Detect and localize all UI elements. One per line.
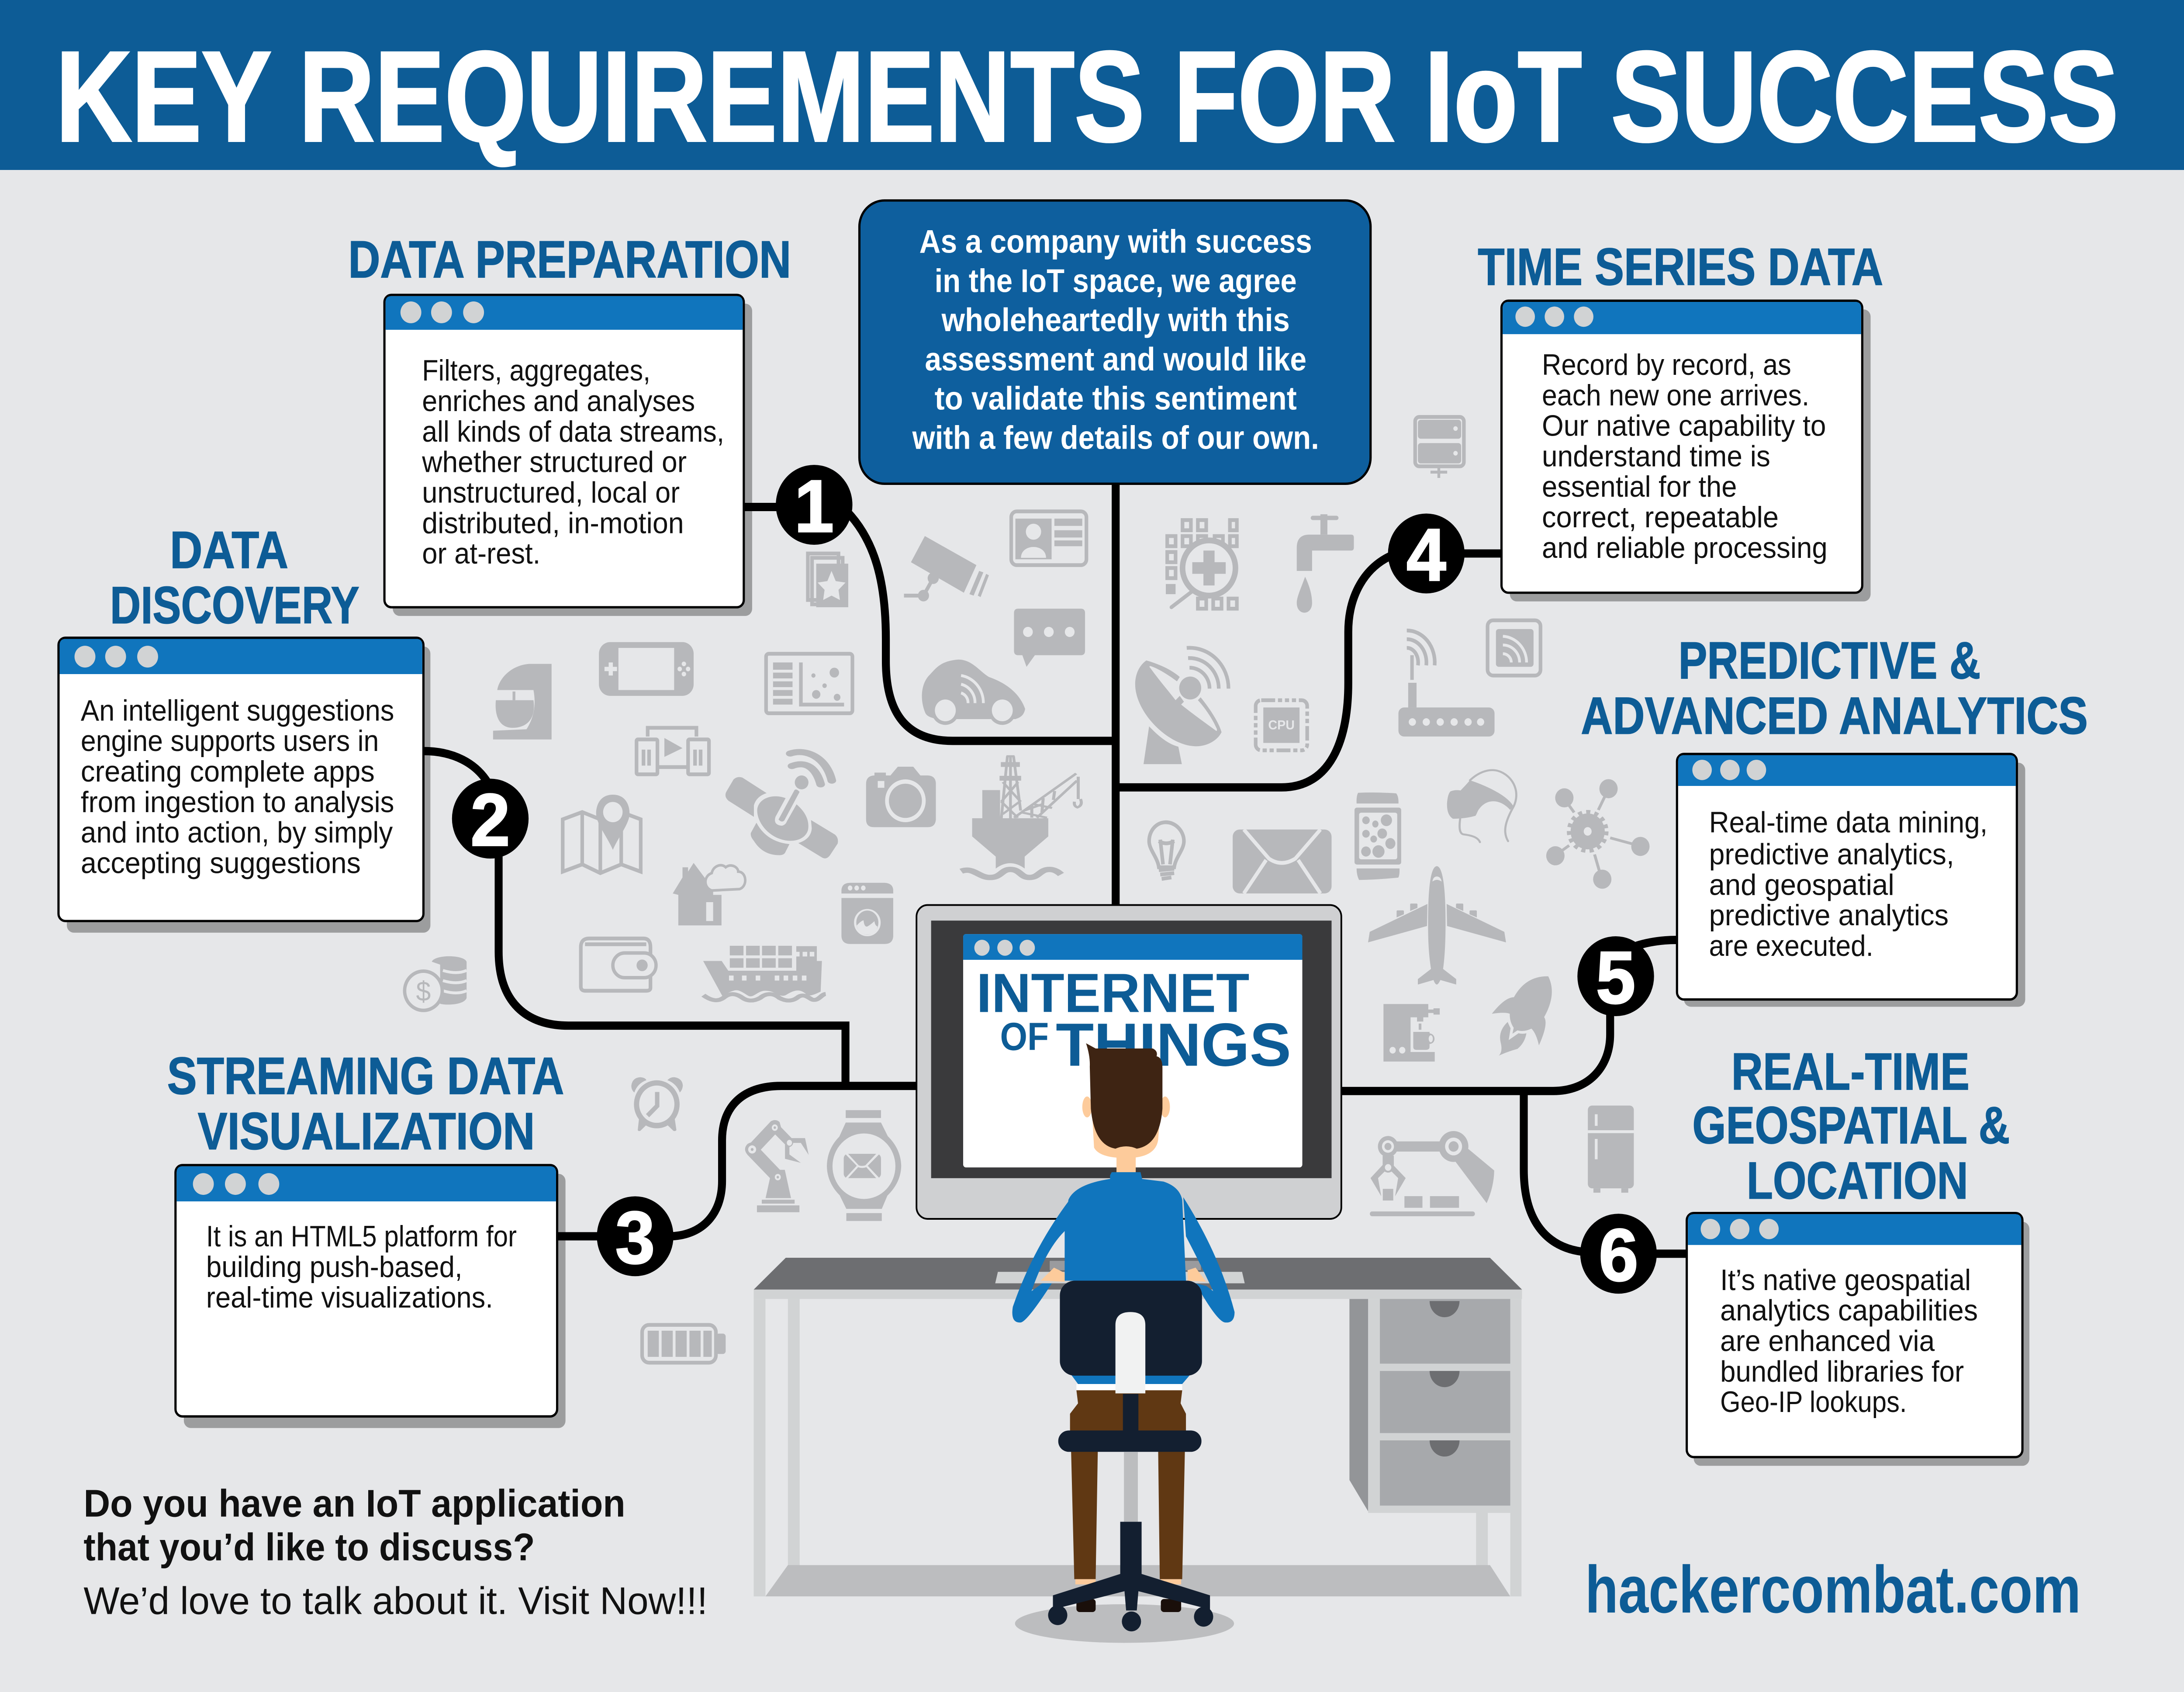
panel: data preparation: unstructured, local or — [422, 476, 680, 509]
panel: predictive and advanced analytics: Real-time data mining, — [1709, 806, 1987, 839]
monitor — [916, 905, 1341, 1219]
panel: time series data: Our native capability to — [1542, 409, 1826, 443]
icon: network gear — [1546, 779, 1649, 889]
icon: coffee machine — [1383, 1004, 1440, 1062]
panel: time series data: essential for the — [1542, 471, 1737, 504]
icon: cpu chip: CPU — [1268, 718, 1295, 732]
panel: data preparation: distributed, in-motion — [422, 507, 684, 540]
panel: streaming data visualization: It is an HTML5 platform for — [206, 1220, 517, 1253]
icon: refrigerator — [1588, 1106, 1634, 1193]
icon: security camera — [904, 536, 989, 602]
panel: real-time geospatial and location: bundled libraries for — [1720, 1355, 1964, 1388]
icon: data panel — [766, 654, 853, 713]
panel: data discovery: engine supports users in — [81, 725, 379, 758]
icon: nfc tag — [1488, 620, 1541, 675]
panel: real-time geospatial and location — [1687, 1213, 2029, 1466]
desk and person illustration — [754, 1043, 1522, 1643]
icon: stand mixer — [493, 664, 552, 740]
icon: camera — [866, 767, 936, 827]
panel: company statement: wholeheartedly with this — [941, 302, 1290, 339]
office chair — [1048, 1281, 1213, 1631]
heading: predictive and advanced analytics: ADVANCED ANALYTICS — [1581, 686, 2088, 745]
number badge 6: 6 — [1599, 1214, 1638, 1297]
icon: mail watch — [827, 1110, 901, 1221]
number badge 3 — [597, 1196, 674, 1279]
panel: data preparation: Filters, aggregates, — [422, 354, 650, 388]
panel: predictive and advanced analytics — [1677, 754, 2025, 1007]
panel: predictive and advanced analytics: predictive analytics — [1709, 899, 1949, 932]
panel: time series data: Record by record, as — [1542, 349, 1791, 381]
icon: id card — [1011, 512, 1086, 565]
number badge 5: 5 — [1596, 937, 1635, 1019]
panel: time series data: each new one arrives. — [1542, 379, 1809, 412]
desk — [754, 1258, 1522, 1596]
panel: streaming data visualization: building push-based, — [206, 1251, 463, 1284]
icon: multi device video — [636, 728, 709, 774]
number badge 1: 1 — [795, 465, 834, 548]
floor shadow — [1015, 1604, 1234, 1643]
number badge 4: 4 — [1406, 514, 1446, 596]
heading: streaming data visualization: VISUALIZATION — [198, 1102, 535, 1160]
icon: satellite dish — [1135, 648, 1229, 764]
icon: airplane — [1368, 866, 1506, 985]
panel: data discovery: An intelligent suggestions — [81, 694, 394, 727]
panel: company statement — [859, 201, 1371, 484]
monitor: OF — [1000, 1014, 1049, 1059]
icon: rocket — [1492, 976, 1552, 1056]
icon: server — [1415, 417, 1464, 478]
icon: smartwatch — [1355, 792, 1401, 880]
panel: data preparation: whether structured or — [422, 446, 687, 479]
panel: time series data: understand time is — [1542, 440, 1770, 473]
panel: company statement: in the IoT space, we agree — [935, 263, 1297, 299]
panel: real-time geospatial and location: are enhanced via — [1720, 1325, 1935, 1358]
panel: time series data: and reliable processing — [1542, 532, 1828, 564]
call to action text: We’d love to talk about it. Visit Now!!! — [83, 1580, 708, 1623]
number badge 3: 3 — [615, 1197, 655, 1279]
panel: predictive and advanced analytics: predictive analytics, — [1709, 838, 1954, 871]
icon: wifi router — [1399, 630, 1495, 737]
number badge 2 — [452, 779, 529, 862]
panel: streaming data visualization — [176, 1165, 566, 1428]
heading: real-time geospatial and location — [1692, 1042, 2010, 1210]
panel: company statement: As a company with success — [919, 223, 1312, 260]
heading: data discovery: DATA — [170, 521, 288, 579]
icon: alarm clock — [631, 1077, 683, 1131]
number badge 4 — [1388, 514, 1465, 596]
icon: coins — [404, 956, 467, 1010]
heading: data discovery: DISCOVERY — [110, 576, 359, 634]
number badge 6 — [1580, 1214, 1657, 1297]
panel: data preparation: enriches and analyses — [422, 385, 695, 418]
panel: data discovery: from ingestion to analysis — [81, 786, 394, 819]
icon: battery — [642, 1325, 726, 1363]
icon: light bulb — [1149, 822, 1184, 879]
panel: data preparation: all kinds of data streams, — [422, 415, 724, 448]
icon: envelope — [1233, 830, 1331, 893]
panel: real-time geospatial and location: It’s native geospatial — [1720, 1264, 1971, 1297]
panel: company statement: with a few details of our own. — [912, 419, 1319, 456]
heading: predictive and advanced analytics: PREDICTIVE & — [1678, 631, 1980, 689]
panel: streaming data visualization: real-time visualizations. — [206, 1281, 493, 1314]
heading: streaming data visualization: STREAMING DATA — [167, 1047, 564, 1105]
icon: grid magnifier — [1166, 520, 1237, 609]
icon: wallet — [581, 938, 656, 991]
panel: company statement: to validate this sentiment — [935, 380, 1297, 417]
icon: coins: $ — [416, 976, 431, 1007]
number badge 1 — [776, 465, 853, 548]
icon: smart home cloud — [673, 863, 745, 925]
panel: company statement: assessment and would like — [925, 341, 1306, 377]
monitor: INTERNET — [976, 962, 1249, 1024]
panel: time series data: correct, repeatable — [1542, 501, 1779, 534]
panel: data discovery — [59, 638, 430, 933]
heading: streaming data visualization — [167, 1047, 564, 1160]
panel: real-time geospatial and location: analytics capabilities — [1720, 1294, 1978, 1327]
connector lines — [423, 484, 1687, 1254]
call to action text: Do you have an IoT application — [83, 1482, 625, 1525]
panel: predictive and advanced analytics: are executed. — [1709, 930, 1873, 962]
icon: cpu chip — [1256, 700, 1307, 751]
panel: predictive and advanced analytics: and geospatial — [1709, 868, 1894, 902]
panel: time series data — [1502, 301, 1871, 602]
heading: predictive and advanced analytics — [1581, 631, 2088, 745]
icon: map pin — [563, 795, 641, 873]
panel: data preparation: or at-rest. — [422, 537, 540, 571]
keyboard — [995, 1261, 1245, 1283]
website url: hackercombat.com — [1585, 1552, 2081, 1627]
heading: data discovery — [110, 521, 359, 634]
icon: washing machine — [841, 883, 893, 944]
heading: real-time geospatial and location: GEOSPATIAL & — [1692, 1096, 2010, 1155]
icon: oil rig — [961, 756, 1082, 878]
icon: satellite — [726, 752, 838, 858]
heading: time series data: TIME SERIES DATA — [1478, 238, 1883, 296]
icon: connected car — [922, 660, 1025, 725]
call to action text: that you’d like to discuss? — [83, 1526, 535, 1569]
icon: robot arm — [745, 1120, 809, 1212]
heading: data preparation: DATA PREPARATION — [348, 230, 791, 289]
panel: real-time geospatial and location: Geo-IP lookups. — [1720, 1386, 1907, 1419]
person — [1013, 1043, 1234, 1612]
icon: vr headset — [1447, 770, 1516, 842]
number badge 2: 2 — [470, 779, 510, 862]
icon: chat bubble — [1014, 609, 1085, 667]
panel: data discovery: creating complete apps — [81, 755, 375, 788]
panel: data preparation — [384, 295, 752, 616]
monitor: THINGS — [1056, 1010, 1291, 1079]
icon: game console — [599, 642, 694, 696]
icon: star layers — [808, 554, 848, 607]
number badge 5 — [1577, 936, 1654, 1019]
heading: real-time geospatial and location: REAL-TIME — [1731, 1042, 1970, 1101]
icon: water tap — [1297, 514, 1354, 612]
heading: real-time geospatial and location: LOCATION — [1747, 1151, 1968, 1210]
panel: data discovery: accepting suggestions — [81, 847, 361, 880]
panel: data discovery: and into action, by simply — [81, 816, 393, 849]
icon: container ship — [703, 946, 826, 1000]
call to action text — [83, 1482, 708, 1623]
icon: factory robot — [1370, 1131, 1494, 1216]
